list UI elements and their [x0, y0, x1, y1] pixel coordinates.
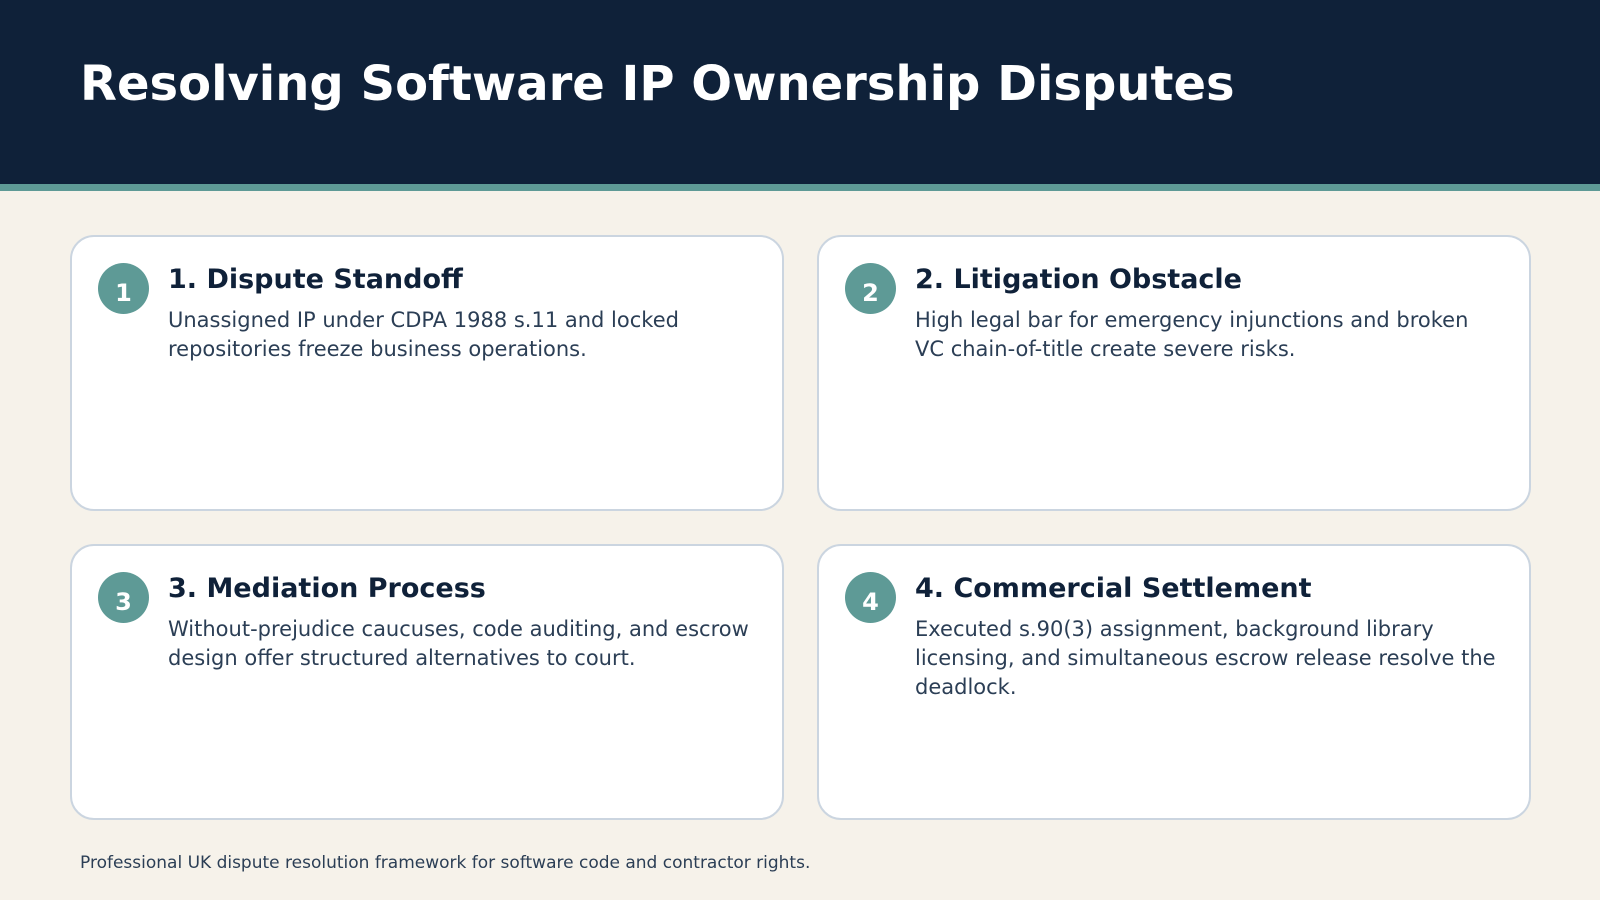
text: Litigation Obstacle description	[915, 308, 1468, 361]
title: Resolving Software IP Ownership Disputes	[80, 56, 1235, 112]
text: Commercial Settlement description: deadlock.	[915, 675, 1017, 699]
icon: number 2	[845, 263, 896, 314]
icon: number 4	[845, 572, 896, 623]
text: Commercial Settlement description: Executed s.90(3) assignment, background library	[915, 617, 1434, 641]
icon: number 4: 4	[862, 588, 879, 616]
text: Litigation Obstacle description: VC chain-of-title create severe risks.	[915, 337, 1295, 361]
panel: 4. Commercial Settlement	[817, 544, 1531, 820]
text: Mediation Process description: Without-prejudice caucuses, code auditing, and escrow	[168, 617, 749, 641]
text: Litigation Obstacle description: High legal bar for emergency injunctions and broken	[915, 308, 1468, 332]
text: Mediation Process description: design offer structured alternatives to court.	[168, 646, 636, 670]
icon: number 2: 2	[862, 279, 879, 307]
header band	[0, 0, 1600, 184]
text: Dispute Standoff description	[168, 308, 679, 361]
icon: number 3	[98, 572, 149, 623]
text: Dispute Standoff description: repositories freeze business operations.	[168, 337, 587, 361]
heading: Commercial Settlement: 4. Commercial Settlement	[915, 573, 1312, 604]
header accent rule	[0, 184, 1600, 191]
footer note: Professional UK dispute resolution framework for software code and contractor rights.	[80, 853, 810, 873]
text: Dispute Standoff description: Unassigned IP under CDPA 1988 s.11 and locked	[168, 308, 679, 332]
icon: number 1: 1	[115, 279, 132, 307]
heading: Mediation Process: 3. Mediation Process	[168, 573, 486, 604]
heading: Dispute Standoff: 1. Dispute Standoff	[168, 264, 463, 295]
panel: 1. Dispute Standoff	[70, 235, 784, 511]
panel: 2. Litigation Obstacle	[817, 235, 1531, 511]
icon: number 3: 3	[115, 588, 132, 616]
text: Commercial Settlement description	[915, 617, 1496, 699]
text: Commercial Settlement description: licensing, and simultaneous escrow release resolve the	[915, 646, 1496, 670]
text: Mediation Process description	[168, 617, 749, 670]
icon: number 1	[98, 263, 149, 314]
heading: Litigation Obstacle: 2. Litigation Obstacle	[915, 264, 1242, 295]
panel: 3. Mediation Process	[70, 544, 784, 820]
